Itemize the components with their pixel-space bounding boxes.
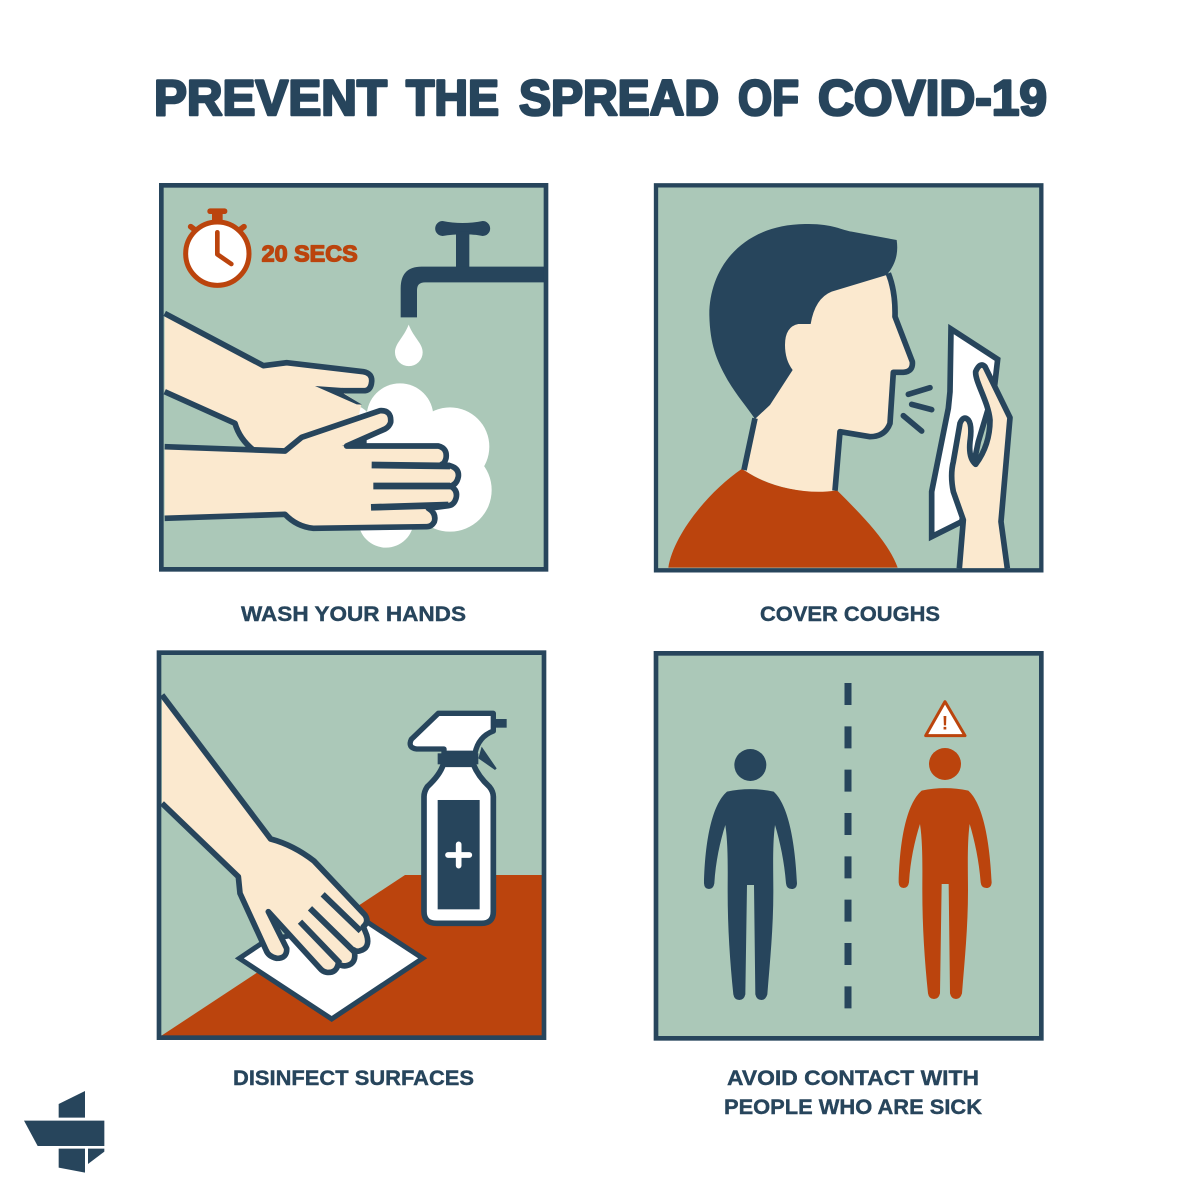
dashed divider — [837, 683, 858, 1008]
lower hand — [165, 411, 458, 528]
panel: avoid contact — [656, 653, 1041, 1038]
panel: disinfect surfaces — [159, 653, 544, 1038]
icon: soap foam — [318, 383, 492, 548]
face and neck — [744, 273, 912, 492]
panel: wash your hands — [161, 185, 546, 569]
cleaning cloth — [239, 922, 423, 1019]
upper hand — [165, 313, 372, 452]
label: cover coughs: COVER COUGHS — [760, 603, 940, 626]
panel: cover coughs — [656, 185, 1041, 570]
label: disinfect surfaces: DISINFECT SURFACES — [233, 1067, 474, 1090]
table surface — [160, 875, 542, 1037]
shirt — [668, 469, 898, 568]
title: COVID-19 — [818, 70, 1047, 126]
label: avoid contact — [724, 1067, 982, 1119]
title: THE — [406, 70, 499, 126]
wiping hand — [162, 695, 368, 972]
icon: warning triangle — [926, 702, 965, 736]
cough lines — [903, 388, 932, 431]
title — [154, 70, 1047, 126]
title: OF — [738, 70, 799, 126]
title: PREVENT — [154, 70, 387, 126]
icon: faucet — [401, 221, 544, 317]
sick person — [899, 748, 992, 999]
icon: stopwatch — [186, 208, 249, 285]
logo — [24, 1091, 104, 1173]
healthy person — [704, 749, 797, 1000]
icon: warning triangle: ! — [942, 714, 948, 735]
stopwatch label: 20 SECS — [262, 240, 358, 266]
tissue — [932, 329, 998, 537]
spray bottle — [410, 713, 507, 923]
hair — [709, 224, 897, 419]
icon: water drop — [395, 325, 423, 366]
hand holding tissue — [952, 365, 1010, 568]
label: avoid contact: AVOID CONTACT WITH — [727, 1067, 979, 1090]
label: wash your hands: WASH YOUR HANDS — [241, 603, 466, 626]
title: SPREAD — [519, 70, 719, 126]
label: avoid contact: PEOPLE WHO ARE SICK — [724, 1096, 982, 1119]
